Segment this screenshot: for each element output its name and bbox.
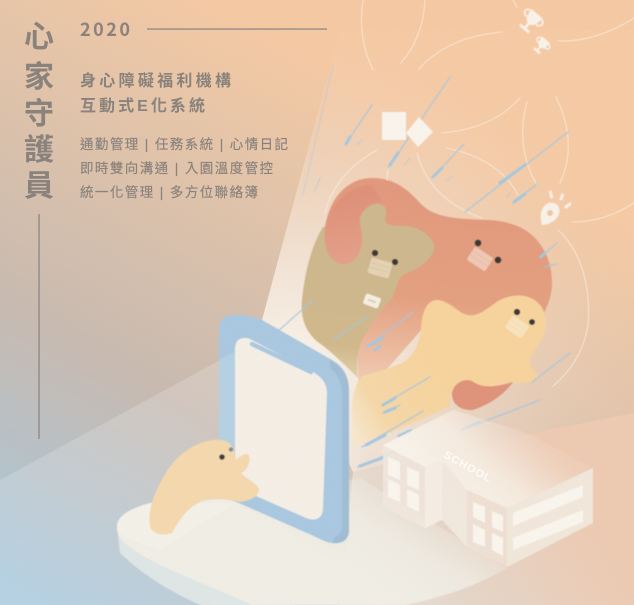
olive badge [363,293,381,309]
vertical title: 家 [24,61,54,94]
subtitle [80,71,231,115]
floor: right side [340,413,634,605]
icon: location pin [541,192,570,225]
red blob [325,178,552,400]
phone screen [235,338,327,520]
title rule [38,214,40,439]
olive eyes [372,250,398,265]
feature list [80,136,288,200]
feature list: 即時雙向溝通 | 入園溫度管控 [80,160,273,176]
school sign: SCHOOL [442,449,493,485]
red blob arm [325,185,382,264]
rain streaks [277,65,570,467]
year: 2020 [80,16,130,42]
red mask [466,246,494,272]
phone speaker bar [252,344,311,372]
school walls [383,445,425,528]
character faces [363,240,535,339]
olive mask [367,257,393,279]
yellow eyes [514,309,535,325]
icon: documents [382,112,433,147]
vertical title: 員 [24,170,54,203]
creature eyes [219,447,233,460]
white arcs [325,0,634,386]
small creature [149,440,259,534]
vertical title: 守 [24,98,54,131]
school building [383,410,593,567]
floor: left light band [0,360,360,605]
red tail [452,380,513,410]
year rule [147,28,327,30]
vertical title: 護 [24,134,54,167]
olive blob [302,204,434,378]
feature list: 通勤管理 | 任務系統 | 心情日記 [80,136,288,152]
subtitle: 互動式E化系統 [80,96,205,115]
icon: trophies [515,6,552,57]
subtitle: 身心障礙福利機構 [80,71,231,90]
school roof [383,410,593,508]
feature list: 統一化管理 | 多方位聯絡簿 [80,184,258,200]
school windows [388,457,583,556]
phone lower-left sheen [219,352,235,490]
red eyes [475,240,501,263]
yellow mask [505,315,529,339]
vertical title: 心 [24,21,54,54]
platform base [117,478,507,605]
yellow blob [352,295,546,447]
phone [219,315,349,543]
light beam [262,30,634,472]
vertical title [24,21,54,203]
